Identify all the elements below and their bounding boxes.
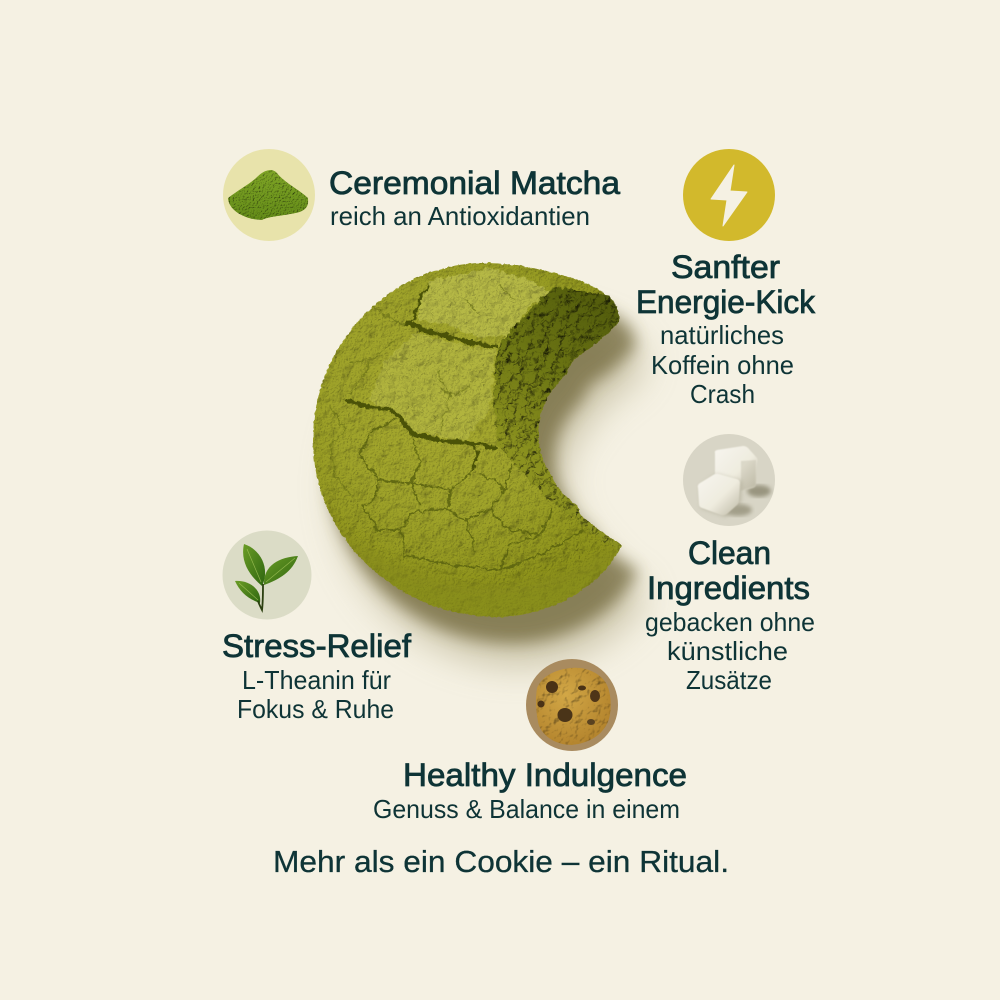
description: Zusätze bbox=[686, 665, 772, 695]
icon: sugar cubes bbox=[683, 434, 775, 526]
description: künstliche bbox=[667, 636, 788, 666]
item: Stress-Relief bbox=[222, 530, 411, 724]
cookie bottom rim bbox=[332, 518, 620, 618]
heading line 2: Ingredients bbox=[647, 570, 810, 606]
bitten crumb interior bbox=[493, 288, 630, 560]
heading: Sanfter bbox=[671, 249, 780, 285]
heading: Stress-Relief bbox=[222, 628, 411, 664]
heading: Healthy Indulgence bbox=[403, 757, 687, 793]
cookie shadow bbox=[329, 289, 646, 665]
icon: chocolate chip cookie bbox=[526, 659, 618, 751]
icon: matcha powder bbox=[223, 149, 315, 241]
description: Fokus & Ruhe bbox=[237, 694, 394, 724]
description: Koffein ohne bbox=[651, 350, 794, 380]
description bbox=[651, 320, 794, 409]
item: Healthy Indulgence bbox=[373, 659, 687, 824]
description: reich an Antioxidantien bbox=[330, 201, 590, 231]
icon: lightning bolt bbox=[683, 149, 775, 241]
description: gebacken ohne bbox=[645, 607, 815, 637]
item: Sanfter Energie-Kick bbox=[636, 149, 816, 409]
item: Ceremonial Matcha bbox=[223, 149, 620, 241]
crust cracks bbox=[330, 285, 585, 570]
heading line 2: Energie-Kick bbox=[636, 284, 816, 320]
lit top crust plates bbox=[368, 268, 552, 440]
item: Clean Ingredients bbox=[645, 434, 815, 695]
heading: Clean bbox=[688, 535, 771, 571]
description: L-Theanin für bbox=[242, 665, 391, 695]
description: Genuss & Balance in einem bbox=[373, 794, 680, 824]
description bbox=[645, 607, 815, 695]
description: Crash bbox=[690, 379, 755, 409]
icon: tea leaves bbox=[222, 530, 312, 620]
cookie crust bbox=[312, 262, 622, 618]
matcha cookie with bite bbox=[312, 262, 622, 618]
description bbox=[237, 665, 394, 724]
tagline: Mehr als ein Cookie – ein Ritual. bbox=[273, 844, 729, 879]
description: natürliches bbox=[660, 320, 784, 350]
heading: Ceremonial Matcha bbox=[329, 165, 620, 201]
